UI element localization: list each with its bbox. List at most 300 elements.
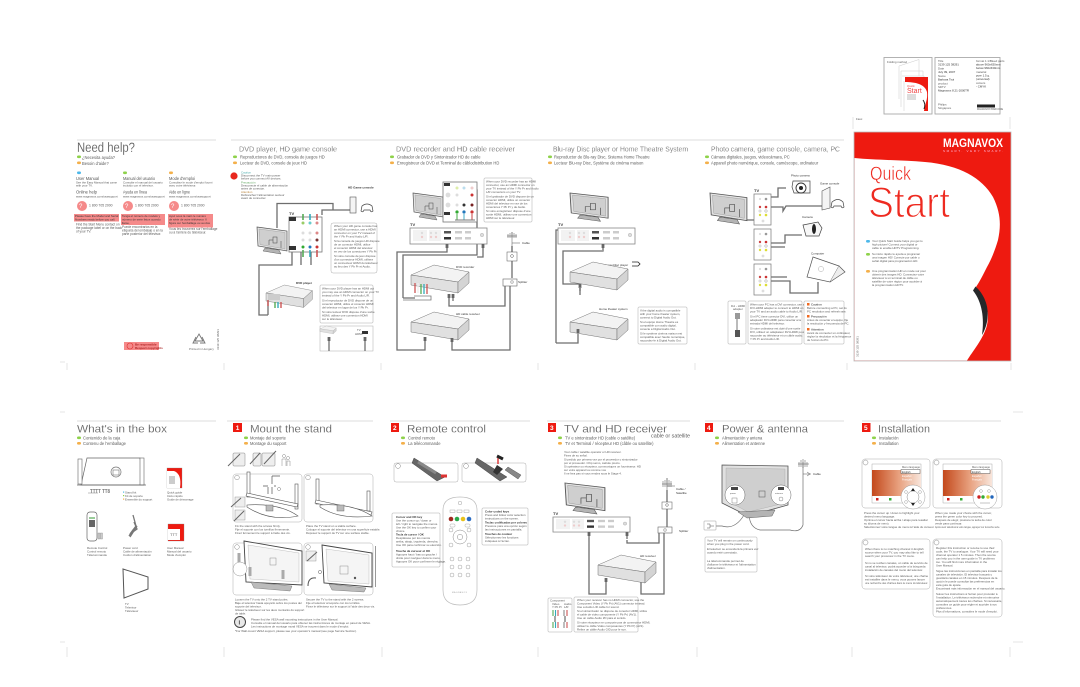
box: print info: above 960x630mm bbox=[976, 62, 1001, 66]
subtitles: Alimentación y antena bbox=[722, 436, 763, 440]
callout: caution: Precaución bbox=[811, 314, 827, 318]
icon: splitter bbox=[503, 279, 527, 286]
panel: mount the stand bbox=[228, 423, 380, 633]
step 4: guardará canales en 15 minutos. Después de la bbox=[936, 576, 998, 580]
callout: hd console: an HDMI connector, use a HDMI bbox=[334, 228, 376, 232]
icon: antenna: Satellite bbox=[676, 491, 687, 495]
callout: hd console: connector on your TV instead of bbox=[334, 231, 375, 235]
step 1 caption: su idioma de menú. bbox=[864, 522, 889, 526]
step badge bbox=[391, 423, 399, 432]
callout: color keys: indiquées à l'écran. bbox=[485, 539, 510, 543]
intro text: Il ne fera pas si vous rendez sous le Stage 4. bbox=[564, 472, 622, 476]
step 1 caption bbox=[864, 511, 934, 529]
callout: dvd: HDMI, utilisez une connexion HDMI bbox=[322, 314, 368, 318]
tv connector panel bbox=[443, 182, 477, 222]
callout: cursor: Touche de curseur et OK bbox=[396, 549, 431, 553]
step 1: Español bbox=[902, 474, 912, 478]
title: Mount the stand bbox=[250, 424, 332, 436]
step 2 caption: Después de elegir, presione la tecla de color bbox=[935, 518, 992, 522]
box: print info: - CMYK bbox=[976, 84, 986, 88]
box: print info: SDTV bbox=[938, 85, 946, 89]
callout: cursor bbox=[392, 513, 446, 567]
caption: booklet bbox=[167, 490, 194, 502]
device: photo camera: Photo camera bbox=[791, 174, 810, 178]
box: folding method: Quick bbox=[907, 84, 915, 88]
subtitles bbox=[401, 436, 441, 446]
step badge: 5 bbox=[864, 425, 868, 432]
subtitles: blu-ray: Lecteur Blu-ray Disc, Système de cinéma maison bbox=[554, 160, 644, 166]
column: english help: Online help bbox=[76, 190, 97, 194]
caption: power cable bbox=[123, 546, 152, 557]
cover background bbox=[854, 132, 1011, 361]
callout: blu-ray: If the digital audio is compatible bbox=[640, 308, 681, 312]
callout: color keys: Sélectionnez les fonctions bbox=[485, 536, 519, 540]
callout: recorder: sortie HDMI, utilisez une connexion bbox=[486, 212, 532, 216]
caption: stand bbox=[123, 490, 153, 502]
box: print info: Name bbox=[938, 74, 946, 78]
text blocks: Your Quick Start Guide helps you get to bbox=[872, 239, 923, 243]
connector panels bbox=[754, 194, 771, 295]
step 3 caption: Glissez le téléviseur sur les deux montants du support bbox=[235, 608, 304, 612]
subtitles: Installation bbox=[879, 441, 899, 446]
icon: splitter bbox=[658, 527, 688, 533]
device: camcorder: Camera bbox=[802, 215, 813, 219]
subtitles: dvd recorder: Enregistreur de DVD et Terminal de câblodistribution HD bbox=[397, 160, 499, 166]
caption: user manual: Mode d'emploi bbox=[167, 553, 186, 557]
box: print info: below 960x630mm bbox=[976, 66, 1001, 70]
callout: hd console: en vez de los conectores Y Pb Pr. bbox=[334, 250, 377, 254]
device: dvd recorder bbox=[403, 265, 474, 301]
callout: color keys: Presione para una opción según bbox=[485, 524, 527, 528]
inset: hdmi connection bbox=[320, 326, 373, 351]
callout: component: Si votre récepteur ne comporte pas de connecteur HDMI, bbox=[577, 620, 650, 624]
subtitles: photo camera: Appareil photo numérique, console, caméscope, ordinateur bbox=[711, 160, 819, 166]
device: hd receiver: HD receiver bbox=[640, 554, 656, 558]
intro text: Si pedido por primera vez por el proveedor o sintonizador bbox=[564, 458, 638, 462]
device: game console: Game console bbox=[820, 182, 840, 186]
step 4: Suivez les instructions à l'écran pour procéder à bbox=[936, 592, 998, 596]
step 2 caption: verde para continuar. bbox=[935, 522, 962, 526]
column: spanish help: Consulte el manual del usuario bbox=[123, 180, 163, 184]
caution: Desconecte el cable de alimentación bbox=[241, 184, 288, 188]
step 3: source when your TV, you may also like to tell bbox=[865, 550, 924, 554]
callout: color keys: las instrucciones en pantalla. bbox=[485, 528, 522, 532]
box: print info: (universal) bbox=[976, 77, 990, 81]
box: print info: Date bbox=[938, 66, 944, 70]
tv side strip bbox=[558, 228, 635, 244]
step badge: 3 bbox=[550, 425, 554, 432]
step 2 caption bbox=[935, 511, 1000, 529]
callout: blu-ray bbox=[638, 307, 687, 344]
tv rear bbox=[413, 193, 443, 220]
column: french help: 1 800 705 2000 bbox=[181, 204, 205, 208]
callout: power: d'alimentation. bbox=[707, 566, 726, 570]
subtitles: need help: ¿Necesita ayuda? bbox=[82, 155, 116, 160]
caption: booklet: Inicio rápido bbox=[167, 494, 183, 498]
step 2 bbox=[933, 459, 1002, 509]
tv connector panel bbox=[289, 214, 322, 257]
subtitles: Montage du support bbox=[250, 441, 287, 446]
step 4 bbox=[304, 543, 373, 595]
item: user manual bbox=[168, 524, 184, 541]
callout: component: utilisez le câble Vidéo composantes (Y Pb Pr) (AV1). bbox=[577, 624, 644, 628]
callout: color keys: instructions on the screen. bbox=[485, 516, 519, 520]
step 4: Encontrará más información en el manual del usuario. bbox=[936, 586, 1005, 590]
vertical code: 3139 125 38291 bbox=[856, 336, 860, 357]
box: component cables: L/R bbox=[564, 605, 568, 609]
subtitles: need help: Besoin d'aide? bbox=[82, 161, 109, 166]
step 3: search your processor in the TV menu. bbox=[865, 554, 915, 558]
callout: dvd: conector HDMI, utilice el conector HDMI bbox=[322, 302, 374, 306]
step 4 caption bbox=[306, 598, 375, 608]
callout: recorder: When your DVD recorder has an HDMI bbox=[486, 180, 536, 184]
subtitles: Alimentation et antenne bbox=[722, 441, 766, 446]
box: print info: MAGNAVOX BARCODE bbox=[977, 108, 1004, 111]
callout: caution bbox=[804, 301, 852, 344]
step 4: Register this instruction or receive to use their bbox=[936, 546, 995, 550]
plug bbox=[602, 244, 604, 251]
step 3 caption: soporte del televisor. bbox=[235, 604, 262, 608]
column: english help: 1 800 705 2000 bbox=[89, 204, 113, 208]
caution bbox=[230, 170, 288, 200]
callout: dvd: Si el reproductor de DVD dispone de un bbox=[322, 298, 373, 302]
callout: computer bbox=[748, 301, 805, 344]
subtitles: Contenido de la caja bbox=[83, 436, 121, 440]
tools icons bbox=[228, 451, 290, 466]
text blocks bbox=[866, 239, 926, 287]
step 3 caption bbox=[235, 598, 304, 616]
callout: hd console: When your HD game console has bbox=[334, 224, 378, 228]
icon: antenna: Cable / bbox=[676, 487, 686, 491]
callout: blu-ray: Si el equipo Home Theatre es bbox=[640, 320, 679, 324]
column: spanish help: parte posterior del televisor. bbox=[122, 232, 161, 236]
subtitles: dvd recorder bbox=[390, 154, 499, 166]
device: laptop bbox=[807, 252, 845, 282]
callout: dvd: del televisor en lugar de los Y Pb Pr. bbox=[322, 306, 369, 310]
callout: computer: Si votre ordinateur est doté d'une sortie bbox=[750, 326, 801, 330]
box: dvi adapter: Dvi - HDMI bbox=[731, 304, 745, 308]
step 4: code, the TV to analogue. Your TV will need your bbox=[936, 550, 999, 554]
step 4: canales de televisión. El televisor buscará y bbox=[936, 572, 992, 576]
icon: splitter: Splitter bbox=[518, 280, 527, 284]
step 4: Plus d'informations, consultez le mode d'emploi. bbox=[936, 610, 998, 614]
caption: remote: Télécommande bbox=[87, 553, 107, 557]
caption: booklet: Quick guide bbox=[167, 490, 183, 494]
caption: user manual: User Manual bbox=[167, 546, 184, 550]
callout: color keys: Touches de couleur bbox=[485, 532, 513, 536]
vertical code strip bbox=[375, 546, 376, 587]
step 3 bbox=[862, 539, 930, 589]
badge: recycle bbox=[124, 342, 163, 350]
step 1 caption: Oprima el cursor hacia arriba / abajo para resaltar bbox=[864, 518, 928, 522]
column: spanish help: ? bbox=[125, 204, 129, 210]
step 2: English bbox=[972, 470, 981, 474]
column: english help: with your TV. bbox=[76, 184, 93, 188]
box: component cables: Y Pb Pr bbox=[552, 605, 562, 609]
callout: caution: réglez la résolution et la fréquence bbox=[807, 334, 852, 338]
callout: caution: Antes de conectar el equipo, fije bbox=[807, 318, 849, 322]
callout: caution: Avant de connecter un ordinateur, bbox=[807, 331, 851, 335]
item: stand: TTTT TT8 bbox=[90, 489, 110, 495]
column: spanish help: 1 800 705 2000 bbox=[135, 204, 159, 208]
column: french help: ou à l'arrière du téléviseur. bbox=[169, 230, 207, 234]
title: What's in the box bbox=[77, 424, 168, 436]
callout: recorder: Si votre enregistreur dispose d'une bbox=[486, 209, 531, 213]
step 3 caption: Baje el televisor hasta apoyarlo sobre los postes del bbox=[235, 601, 302, 605]
subtitles: Contenu de l'emballage bbox=[83, 441, 127, 446]
plugs bbox=[446, 244, 484, 251]
subtitles bbox=[77, 436, 127, 446]
badge: recycle: Respect copyrights bbox=[135, 346, 163, 350]
icon: recycle: Printed in Hungary bbox=[189, 347, 214, 351]
box: print info: Philips bbox=[938, 102, 947, 106]
title: quick: Quick bbox=[870, 164, 911, 185]
subtitles: Montaje del soporte bbox=[250, 436, 287, 440]
column: french help: figure sur l'emballage ou au dos bbox=[169, 221, 210, 225]
step 3: est installée dans le menu, vous pouvez lancer bbox=[865, 578, 925, 582]
title suffix: cable or satellite bbox=[651, 434, 690, 440]
caption: stand: Stand kit bbox=[125, 490, 136, 494]
caution: Caution bbox=[241, 170, 251, 174]
item: user manual: TTT bbox=[170, 532, 178, 537]
title: photo camera: Photo camera, game console, camera, PC bbox=[711, 144, 841, 154]
column: english help: Please have the Model and Serial bbox=[75, 214, 119, 218]
plugs bbox=[588, 532, 642, 585]
step badge bbox=[862, 423, 870, 432]
intro text: por el proveedor. Chip servo, calcule precio. bbox=[564, 461, 621, 465]
callout: component: Use a Audio L/R cable for sound. bbox=[577, 605, 619, 609]
step 1: English bbox=[902, 470, 911, 474]
device: blu-ray bbox=[570, 262, 640, 295]
label: TV bbox=[410, 222, 415, 227]
column: english help: the package label or on the back bbox=[76, 226, 122, 230]
device: hd cable receiver: HD cable receiver bbox=[456, 312, 480, 316]
text blocks: cable to enable HDTV Programming. bbox=[872, 246, 919, 250]
callout: cursor: Use the cursor up / down or bbox=[396, 518, 432, 522]
caution: Disconnect the TV main power bbox=[241, 174, 280, 178]
step 2 caption: Après avoir sélectionné votre langue, appuyez sur la touche verte. bbox=[935, 525, 1000, 529]
logo: MAGNAVOX bbox=[943, 138, 1003, 150]
caution: Attention bbox=[241, 190, 253, 194]
box: component cables: Audio bbox=[564, 602, 572, 606]
callout: recorder: L/R connectors on your TV. bbox=[486, 190, 521, 194]
tip: vesa: *For Wall-mount VESA support, please see your operator's manual (see page Service Section). bbox=[235, 629, 357, 633]
callout: dvd: sur le téléviseur. bbox=[322, 317, 343, 321]
callout: blu-ray: compatible avec l'audio numérique, bbox=[640, 335, 685, 339]
caption: stand: Ensemble du support bbox=[125, 498, 153, 502]
title: dvd recorder: DVD recorder and HD cable receiver bbox=[396, 144, 515, 154]
step 1 caption: desired menu language. bbox=[864, 514, 895, 518]
step 4: can help you in the user guide in TV problems bbox=[936, 556, 995, 560]
caption: tv: Téléviseur bbox=[125, 609, 138, 613]
callout: computer: adaptador DVI-HDMI para conectar a la bbox=[750, 318, 801, 322]
device: home theatre: Home theater system bbox=[599, 307, 628, 311]
box: print info bbox=[935, 58, 1005, 114]
panel: power and antenna bbox=[704, 423, 821, 572]
step 1: Menu language bbox=[902, 465, 920, 469]
step 4: Sigue las instrucciones en pantalla para instalar los bbox=[936, 569, 1002, 573]
item: quick start booklet bbox=[167, 468, 182, 488]
label: TV bbox=[289, 211, 294, 216]
text blocks: obtenir des images HD. Connectez votre bbox=[872, 272, 924, 276]
callout: cursor: Use the OK key to confirm your bbox=[396, 526, 436, 530]
callout: cursor: Use OK para confirmar su elección. bbox=[396, 543, 442, 547]
caption: tv bbox=[125, 602, 138, 613]
title: blu-ray: Blu-ray Disc player or Home Theatre System bbox=[553, 144, 688, 154]
step 1 caption bbox=[235, 524, 291, 535]
step 4 caption: Fixez le téléviseur sur le support à l'aide des deux vis. bbox=[306, 604, 375, 608]
column: spanish help: Ayuda en línea bbox=[123, 190, 147, 194]
callout: hd console: el conector HDMI del televisor bbox=[334, 246, 373, 250]
step 2 caption: When you made your choice with the cursor, bbox=[935, 511, 992, 515]
panel: remote control bbox=[391, 423, 528, 605]
callout: computer: your TV and an audio cable to Audio L/R. bbox=[750, 310, 803, 314]
box: folding method bbox=[884, 58, 932, 114]
callout: hd console: the Y Pb Pr and Audio L/R. bbox=[334, 234, 369, 238]
column: english help: Find the Start Menu contact on bbox=[76, 222, 120, 226]
icon: antenna: Cable bbox=[522, 241, 530, 245]
column: english help: See the Easy Manual that came bbox=[76, 180, 117, 184]
step 3: instalación de canales del menú del televisor. bbox=[865, 568, 923, 572]
callout: dvd bbox=[320, 285, 379, 323]
callout: power bbox=[705, 537, 759, 572]
callout: hd console: Si votre console de jeux dispose bbox=[334, 254, 376, 258]
callout: power: d'allumer le téléviseur et l'alimentation bbox=[707, 562, 756, 566]
column: spanish help: número de serie listos cuando bbox=[122, 218, 161, 222]
box: print info: Magnavox 8.21-2000TR bbox=[938, 88, 969, 92]
text blocks: una imagen HD! Conecte por cable o bbox=[872, 256, 920, 260]
step 4: channel operator 1 5 minutes. Then the source bbox=[936, 553, 996, 557]
box: print info: colours bbox=[976, 81, 986, 85]
title: Power & antenna bbox=[722, 424, 809, 436]
text blocks: la programmation HDTV. bbox=[872, 283, 904, 287]
step 4: too. You will find more information in the bbox=[936, 560, 987, 564]
step 2: Français bbox=[972, 478, 983, 482]
subtitles: dvd player: Reproductores de DVD, consola de juegos HD bbox=[240, 154, 325, 160]
subtitles: photo camera: Cámara digitales, juegos, videocámara, PC bbox=[711, 154, 790, 160]
caution: avant de connecter. bbox=[241, 196, 266, 200]
callout: computer: DVI-HDMI adapter to connect to HDMI on bbox=[750, 306, 804, 310]
step 1: Français bbox=[902, 478, 913, 482]
column: spanish help: llame. bbox=[122, 221, 130, 225]
callout: component: Component Video (Y Pb Pr) (AV1) connector instead. bbox=[577, 602, 645, 606]
callout: cursor: Appuyez haut / bas ou gauche / bbox=[396, 552, 437, 556]
caption: booklet: Guide de démarrage bbox=[167, 498, 194, 502]
panel: DVD recorder and HD cable receiver bbox=[390, 144, 539, 350]
intro text bbox=[564, 450, 641, 476]
callout: power: cuando esté conectado. bbox=[707, 550, 738, 554]
step 3 bbox=[233, 541, 302, 595]
tv rear bbox=[710, 193, 747, 224]
step badge bbox=[705, 423, 713, 432]
tip: vesa: Please find the VESA wall mounting instructions in the User Manual. bbox=[251, 618, 338, 622]
callout: cursor: Tecla de cursor / OK bbox=[396, 532, 425, 536]
step 3: When there is no matching channel in English bbox=[865, 547, 924, 551]
column: english help: User Manual bbox=[76, 176, 99, 181]
step 1 bbox=[394, 458, 458, 482]
step badge bbox=[548, 423, 556, 432]
subtitles: blu-ray bbox=[548, 154, 650, 166]
column: english help: www.magnavox.com/usasupport bbox=[76, 194, 118, 198]
step 2 caption: Place the TV stand on a stable surface. bbox=[306, 524, 357, 528]
caption: power cable: Power cord bbox=[123, 546, 138, 550]
step 1 caption: Sélectionnez votre langue de menu à l'aide du curseur. bbox=[864, 525, 934, 529]
caption: user manual: Manual del usuario bbox=[167, 550, 192, 554]
title: Remote control bbox=[407, 424, 486, 436]
title: Installation bbox=[878, 424, 930, 436]
box: print info: material bbox=[976, 70, 987, 74]
callout: computer: entrada HDMI del televisor. bbox=[750, 322, 785, 326]
callout: component: When your receiver has no HDMI connector, use the bbox=[577, 598, 645, 602]
step 2 caption: Coloque el soporte del televisor en una superficie estable. bbox=[306, 528, 380, 532]
caption: tv: Televisor bbox=[125, 606, 136, 610]
step 2 bbox=[304, 474, 373, 522]
step 4: automatiquement toutes les chaînes. Si nécessaire, bbox=[936, 599, 1002, 603]
title: start: Start bbox=[868, 179, 950, 227]
callout: component: Use un cable Audio I/D para el sonido. bbox=[577, 616, 626, 620]
caption: remote: Control remoto bbox=[87, 550, 107, 554]
inset: hdmi connection: HDMI bbox=[355, 332, 363, 336]
subtitles bbox=[872, 436, 899, 446]
panel: what's in the box bbox=[77, 424, 194, 613]
callout: component bbox=[574, 597, 650, 632]
box: print info: product bbox=[938, 82, 948, 86]
callout: hd console: un connecteur HDMI du téléviseur bbox=[334, 261, 378, 265]
tv side strip bbox=[553, 517, 630, 532]
callout: color keys bbox=[482, 508, 528, 545]
callout: blu-ray: raccordez-le à Digital Audio Out. bbox=[640, 338, 682, 342]
callout: computer: Si el PC tiene conector DVI, utilice un bbox=[750, 314, 798, 318]
callout: caution: la resolución y frecuencia de PC. bbox=[807, 322, 849, 326]
box: component cables bbox=[548, 598, 572, 632]
device: photo camera bbox=[791, 174, 810, 193]
box: component cables: Component bbox=[550, 598, 565, 602]
callout: recorder: HDMI del televisor en vez de los bbox=[486, 202, 528, 206]
callout: cursor: droite pour naviguer dans le menu. bbox=[396, 556, 441, 560]
caption: remote bbox=[87, 546, 108, 557]
step 4: opción le puede consultar las preferencias en bbox=[936, 580, 995, 584]
callout: color keys: Teclas codificadas por colores bbox=[485, 520, 527, 524]
column: french help: www.magnavox.com/usasupport bbox=[169, 194, 211, 198]
callout: component: Si el sintonizador no dispone de conector HDMI, utilice bbox=[577, 609, 647, 613]
icon: antenna bbox=[507, 232, 530, 261]
callout: blu-ray: connect to Digital Audio Out. bbox=[640, 316, 677, 320]
box: print info: Barbara Tsui bbox=[938, 78, 955, 82]
callout: dvd: you may use an HDMI connector on your TV bbox=[322, 290, 379, 294]
callout: cursor: Desplácese por los menús bbox=[396, 536, 431, 540]
subtitles: blu-ray: Reproductor de Blu-ray Disc, Sistema Home Theatre bbox=[554, 154, 650, 160]
step 3: Si no se reciben canales, un cable de servicio de bbox=[865, 561, 928, 565]
tv side strip bbox=[410, 228, 487, 244]
box: print info: format 1:1/Bleed parts bbox=[976, 59, 1005, 63]
column: french help: Aide en ligne bbox=[169, 190, 190, 194]
text blocks: téléviseur à un terminal de câble ou bbox=[872, 276, 918, 280]
box: print info: 3139 125 38291 bbox=[938, 62, 959, 66]
step 3 caption: Loosen the TV onto the 2 TV stand poles. bbox=[235, 598, 288, 602]
box: print info: Singapore bbox=[938, 106, 952, 110]
callout: computer: raccorder au téléviseur et un câble audio. bbox=[750, 334, 803, 338]
label: TV bbox=[558, 222, 563, 227]
callout: recorder: conectores Y Pb Pr y de Audio. bbox=[486, 205, 526, 209]
logo: SMART. VERY SMART. bbox=[943, 149, 1003, 153]
wires bbox=[397, 190, 512, 350]
callout: recorder: Si el grabador de DVD dispone de un bbox=[486, 194, 534, 198]
subtitles: dvd recorder: Grabador de DVD y Sintonizador HD de cable bbox=[397, 154, 481, 160]
caption: user manual bbox=[167, 546, 192, 557]
callout: cursor: arriba, abajo, izquierda, derecha. bbox=[396, 540, 438, 544]
callout: hd console: d'un connecteur HDMI, utilisez bbox=[334, 258, 374, 262]
text blocks: Su inicio rápido le ayuda a programar bbox=[872, 252, 920, 256]
